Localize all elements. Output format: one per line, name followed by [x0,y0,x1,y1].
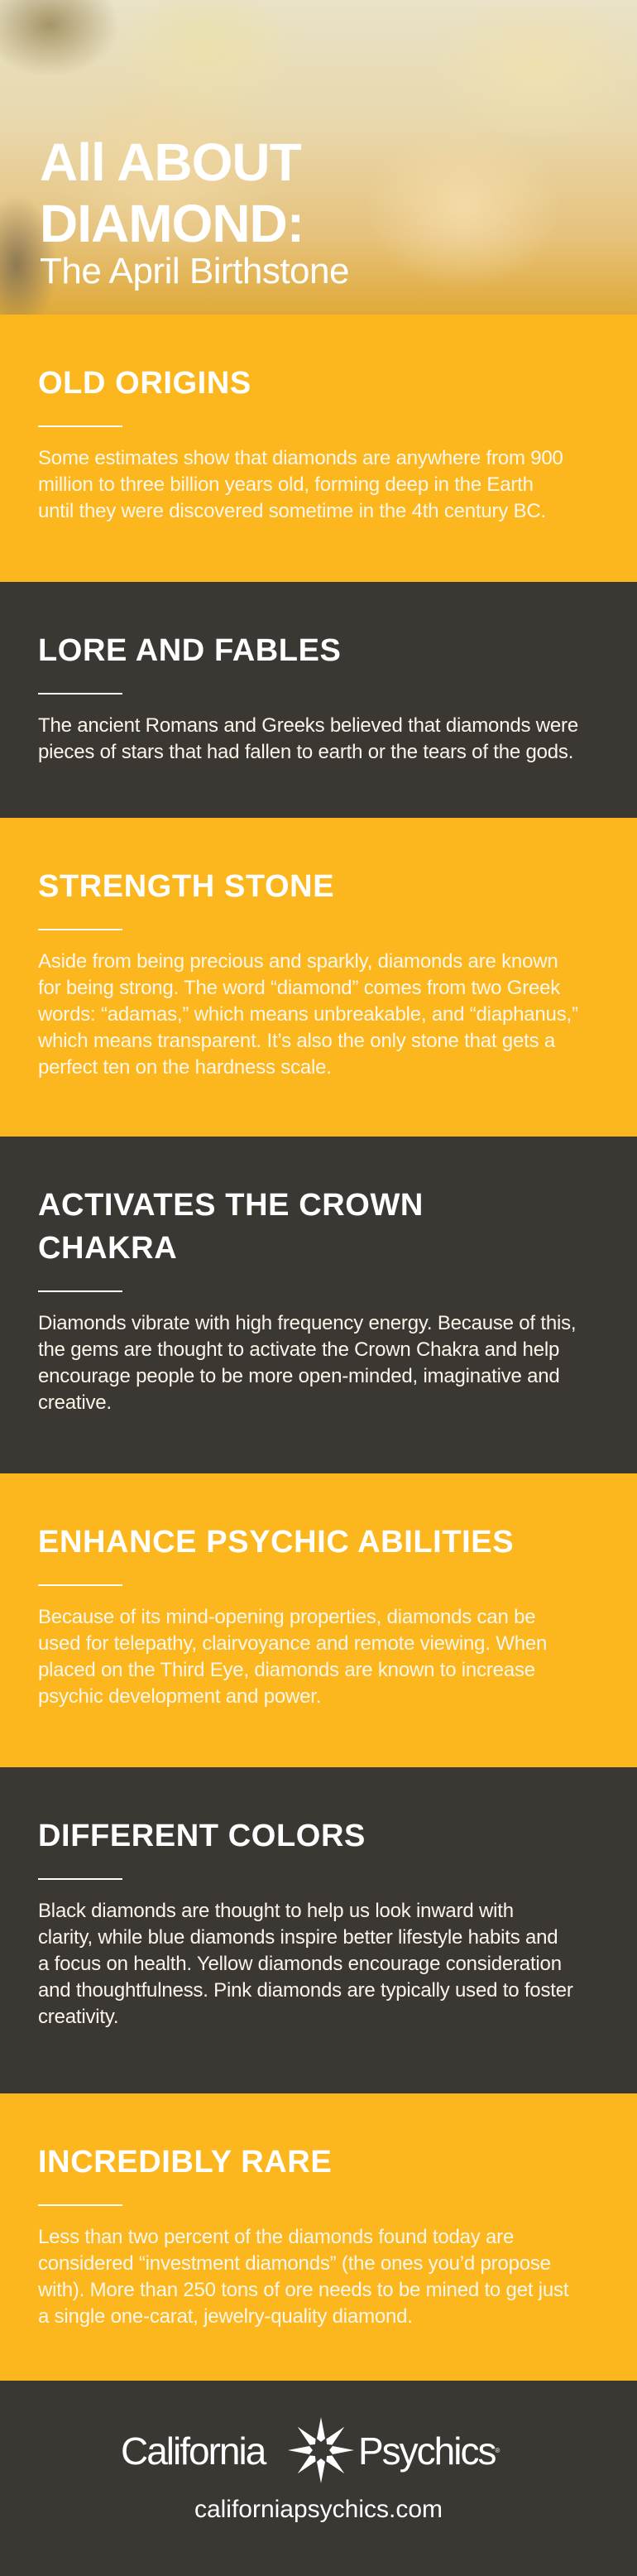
heading: LORE AND FABLES [38,633,341,668]
text block: creativity. [38,2006,118,2028]
text block: perfect ten on the hardness scale. [38,1056,332,1079]
text block [38,714,578,763]
heading: INCREDIBLY RARE [38,2145,332,2180]
text block: Because of its mind-opening properties, diamonds can be [38,1606,535,1628]
text block: for being strong. The word “diamond” comes from two Greek [38,977,560,999]
text block: creative. [38,1391,112,1414]
text block: a single one-carat, jewelry-quality diamond. [38,2305,413,2328]
text block [38,2226,569,2328]
icon: star [288,2417,354,2483]
panel: incredibly rare [0,2093,637,2381]
text block [38,447,563,522]
panel: old origins [0,315,637,582]
text block: words: “adamas,” which means unbreakable, and “diaphanus,” [38,1003,578,1026]
heading: ACTIVATES THE CROWN [38,1188,424,1223]
heading: DIFFERENT COLORS [38,1819,366,1853]
text block: pieces of stars that had fallen to earth or the tears of the gods. [38,741,573,763]
heading [38,1188,424,1266]
panel: different colors [0,1767,637,2093]
text block: Some estimates show that diamonds are anywhere from 900 [38,447,563,469]
panel: strength stone [0,818,637,1137]
logo text left: California [121,2429,265,2473]
text block: Diamonds vibrate with high frequency energy. Because of this, [38,1312,576,1334]
heading: CHAKRA [38,1231,177,1266]
text block: with). More than 250 tons of ore needs to be mined to get just [38,2279,568,2301]
panel: crown chakra [0,1137,637,1473]
text block [38,1312,576,1414]
text block: the gems are thought to activate the Crown Chakra and help [38,1338,559,1361]
text block: clarity, while blue diamonds inspire better lifestyle habits and [38,1926,558,1949]
text block: Black diamonds are thought to help us look inward with [38,1900,514,1922]
url: californiapsychics.com [194,2496,443,2523]
text block: considered “investment diamonds” (the ones you’d propose [38,2252,551,2275]
text block: used for telepathy, clairvoyance and remote viewing. When [38,1632,547,1655]
title line 2: DIAMOND: [40,194,304,253]
text block: encourage people to be more open-minded, imaginative and [38,1365,560,1387]
text block: million to three billion years old, forming deep in the Earth [38,473,534,496]
heading: OLD ORIGINS [38,366,251,401]
text block: Aside from being precious and sparkly, diamonds are known [38,950,558,973]
text block: until they were discovered sometime in the 4th century BC. [38,500,546,522]
text block: The ancient Romans and Greeks believed that diamonds were [38,714,578,737]
text block [38,1606,547,1708]
subtitle: The April Birthstone [40,251,349,291]
panel: lore and fables [0,582,637,818]
text block: placed on the Third Eye, diamonds are known to increase [38,1659,535,1681]
text block [38,950,578,1079]
text block: psychic development and power. [38,1685,321,1708]
logo [121,2417,500,2483]
text block [38,1900,573,2028]
footer [0,2381,637,2576]
title line 1: All ABOUT [40,132,301,192]
text block: which means transparent. It’s also the only stone that gets a [38,1030,555,1052]
text block: Less than two percent of the diamonds found today are [38,2226,514,2248]
header: title banner [0,0,637,315]
text block: a focus on health. Yellow diamonds encourage consideration [38,1953,562,1975]
heading: STRENGTH STONE [38,869,334,904]
logo text right: Psychics® [358,2429,498,2473]
heading: ENHANCE PSYCHIC ABILITIES [38,1525,514,1560]
panel: psychic abilities [0,1473,637,1767]
text block: and thoughtfulness. Pink diamonds are typically used to foster [38,1979,573,2002]
